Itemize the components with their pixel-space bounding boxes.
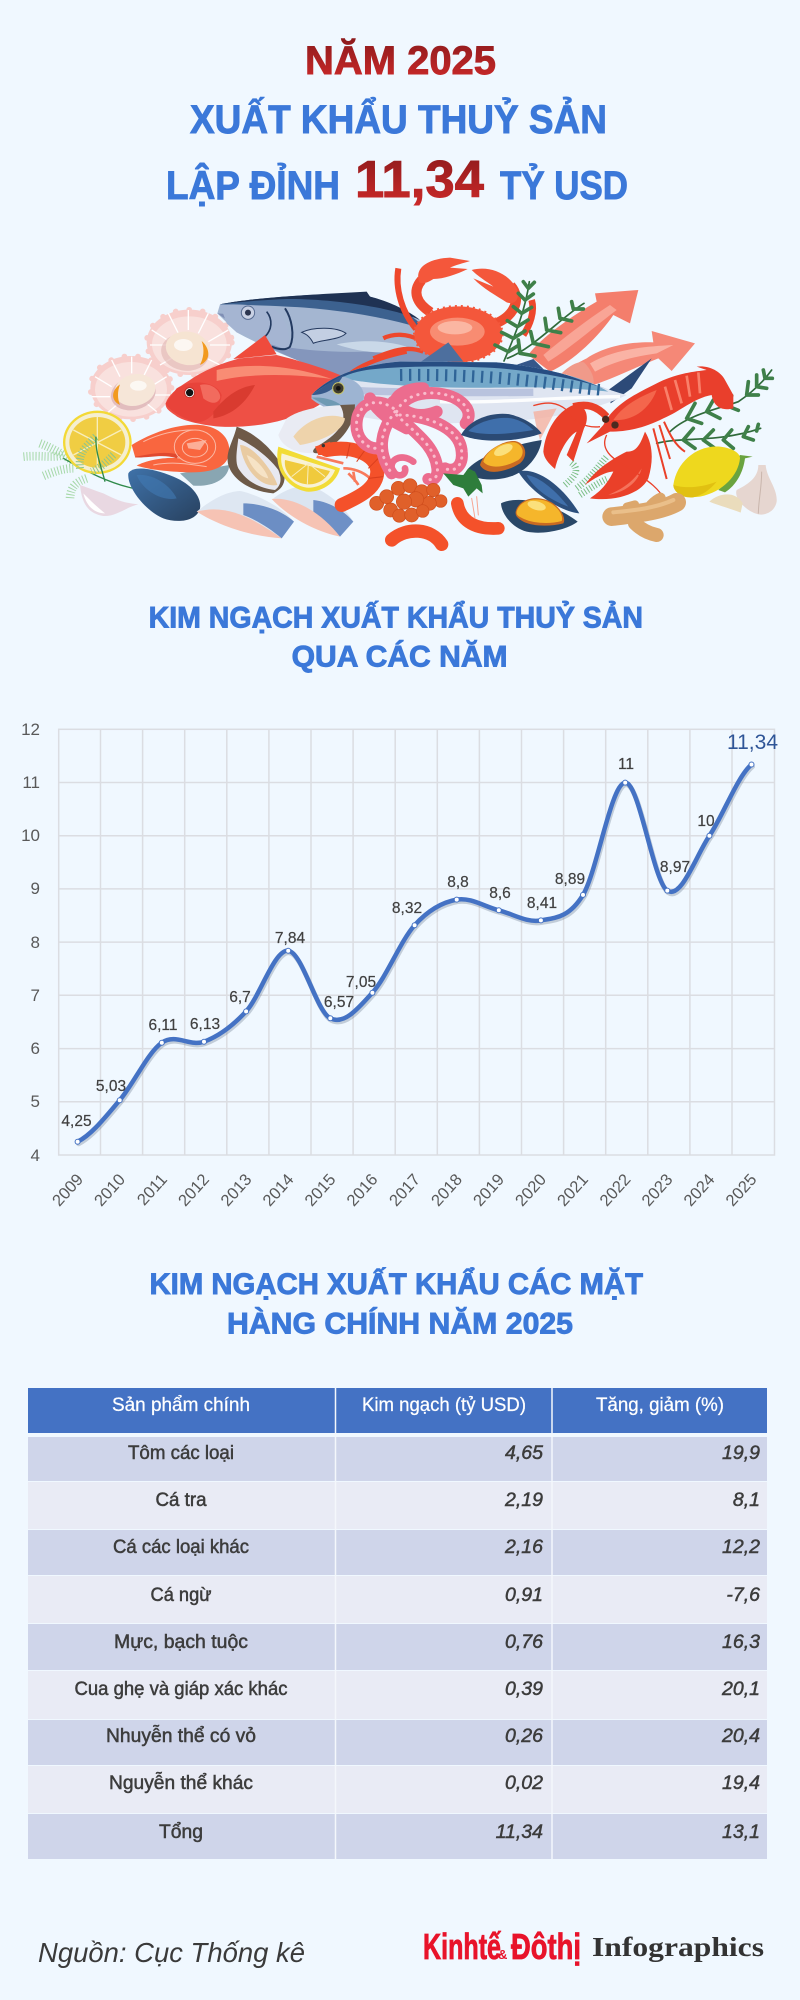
data labels: 6,11 (148, 1017, 178, 1034)
icon: oysters (228, 404, 355, 493)
table header: Sản phẩm chính (112, 1394, 250, 1416)
x axis labels: 2011 (134, 1171, 171, 1209)
data labels: 10 (697, 813, 715, 830)
row: Tổng: 13,1 (722, 1821, 760, 1843)
row: Tôm các loại: Tôm các loại (128, 1442, 234, 1464)
y axis labels: 5 (31, 1092, 40, 1111)
data labels: 7,84 (275, 930, 305, 947)
table header (28, 1388, 767, 1433)
row: Cua ghẹ và giáp xác khác: 20,1 (721, 1678, 760, 1700)
data labels: 6,13 (190, 1016, 220, 1033)
icon: fish fillets (197, 486, 353, 538)
row: Nguyễn thể khác (28, 1766, 767, 1813)
x axis labels: 2022 (597, 1171, 634, 1210)
icon: ginger (612, 498, 677, 535)
logo (423, 1926, 764, 1967)
row: Nhuyễn thể có vỏ (28, 1720, 767, 1765)
heading: table (150, 1267, 643, 1340)
icon: mackerel (312, 342, 652, 440)
row: Cá ngừ: -7,6 (726, 1584, 760, 1606)
table header: Kim ngạch (tỷ USD) (362, 1394, 526, 1416)
icon: garlic clove (80, 485, 138, 516)
icon: lemon slice (63, 411, 132, 482)
x axis labels: 2025 (723, 1171, 760, 1210)
data labels: 8,89 (555, 871, 585, 888)
row: Nhuyễn thể có vỏ: 0,26 (505, 1725, 543, 1747)
row: Cua ghẹ và giáp xác khác: Cua ghẹ và giáp xác khác (74, 1678, 288, 1700)
icon: octopus (356, 388, 469, 480)
icon: tuna (217, 292, 440, 379)
row: Tôm các loại: 19,9 (722, 1442, 760, 1464)
icon: squid (528, 290, 695, 385)
x axis labels: 2018 (428, 1171, 466, 1210)
heading: chart: KIM NGẠCH XUẤT KHẨU THUỶ SẢN (149, 600, 643, 634)
x axis labels: 2023 (639, 1171, 676, 1210)
icon: salmon steak (132, 425, 229, 486)
icon: small dill (565, 457, 608, 495)
title: XUẤT KHẨU THUỶ SẢN (190, 95, 607, 142)
data line (78, 764, 753, 1144)
y axis labels: 9 (31, 879, 40, 898)
data labels: 4,25 (61, 1113, 92, 1130)
row: Cá tra (28, 1482, 767, 1529)
row: Nhuyễn thể có vỏ: 20,4 (721, 1725, 760, 1747)
row: Tổng (28, 1814, 767, 1859)
row: Cá các loại khác: Cá các loại khác (113, 1536, 249, 1558)
heading: table: KIM NGẠCH XUẤT KHẨU CÁC MẶT (150, 1267, 643, 1301)
row: Cá tra: 8,1 (733, 1489, 760, 1511)
icon: lobster (533, 366, 733, 500)
row: Cua ghẹ và giáp xác khác (28, 1671, 767, 1719)
title: LẬP ĐỈNH (166, 162, 340, 208)
y axis labels: 8 (31, 933, 40, 952)
heading: table: HÀNG CHÍNH NĂM 2025 (227, 1306, 573, 1340)
icon: lemon wedge (277, 447, 340, 492)
logo: & (498, 1947, 507, 1962)
data labels: 11,34 (727, 731, 778, 754)
data labels: 6,7 (229, 989, 251, 1006)
title: NĂM 2025 (305, 38, 496, 83)
y axis labels (21, 720, 40, 1165)
row: Nguyễn thể khác: Nguyễn thể khác (109, 1771, 253, 1794)
illustration: seafood still life (23, 258, 777, 544)
data labels: 11 (618, 756, 634, 773)
row: Mực, bạch tuộc: 0,76 (505, 1631, 543, 1653)
x axis labels: 2010 (91, 1171, 129, 1210)
y axis labels: 4 (31, 1146, 40, 1165)
x axis labels: 2009 (49, 1171, 87, 1210)
title: 11,34 (355, 151, 484, 209)
data markers (75, 762, 754, 1144)
y axis labels: 10 (21, 826, 40, 845)
x axis labels: 2015 (302, 1171, 339, 1210)
x axis labels: 2013 (218, 1171, 255, 1210)
x axis labels: 2014 (260, 1171, 297, 1210)
row: Tôm các loại: 4,65 (505, 1442, 543, 1464)
data labels: 7,05 (346, 974, 376, 991)
title: TỶ USD (500, 162, 628, 208)
x axis labels: 2016 (344, 1171, 381, 1210)
row: Cá tra: 2,19 (504, 1489, 543, 1511)
row: Mực, bạch tuộc: Mực, bạch tuộc (114, 1631, 248, 1653)
icon: right rosemary (657, 370, 772, 448)
row: Cua ghẹ và giáp xác khác: 0,39 (505, 1678, 543, 1700)
row: Nhuyễn thể có vỏ: Nhuyễn thể có vỏ (106, 1724, 256, 1747)
y axis labels: 11 (22, 773, 40, 792)
data labels: 8,41 (527, 895, 557, 912)
data labels (61, 731, 778, 1130)
heading: chart (149, 600, 643, 674)
source note: Nguồn: Cục Thống kê (38, 1937, 305, 1968)
icon: rosemary (495, 282, 584, 361)
row: Cá ngừ: Cá ngừ (150, 1584, 212, 1606)
x axis labels: 2012 (175, 1171, 213, 1210)
x axis labels: 2017 (386, 1171, 424, 1210)
row: Mực, bạch tuộc: 16,3 (722, 1631, 760, 1653)
logo: Kinhtế (423, 1926, 502, 1967)
row: Tổng: 11,34 (496, 1821, 543, 1843)
data labels: 8,8 (447, 874, 469, 891)
row: Cá ngừ: 0,91 (505, 1584, 543, 1606)
x axis labels: 2020 (512, 1171, 550, 1210)
x axis labels: 2019 (470, 1171, 508, 1210)
icon: red fish (166, 335, 353, 427)
x axis labels: 2024 (681, 1171, 718, 1210)
y axis labels: 6 (31, 1039, 40, 1058)
heading: chart: QUA CÁC NĂM (292, 640, 508, 674)
row: Mực, bạch tuộc (28, 1624, 767, 1670)
data labels: 8,6 (489, 885, 511, 902)
title (166, 38, 628, 209)
icon: parsley (443, 468, 483, 497)
row: Tôm các loại (28, 1437, 767, 1481)
row: Cá tra: Cá tra (156, 1489, 207, 1511)
icon: left dill sprig (23, 443, 133, 500)
table (28, 1388, 767, 1859)
line chart (21, 720, 778, 1210)
logo: Infographics (592, 1932, 764, 1962)
icon: roe (370, 479, 447, 522)
icon: closed mussel (128, 469, 200, 521)
x axis labels (49, 1171, 760, 1210)
icon: scallops (90, 310, 232, 419)
row: Cá các loại khác (28, 1530, 767, 1575)
logo: Đôthị (511, 1926, 581, 1967)
row: Tổng: Tổng (159, 1821, 203, 1843)
y axis labels: 7 (31, 986, 40, 1005)
table header: Tăng, giảm (%) (596, 1394, 724, 1416)
row: Nguyễn thể khác: 19,4 (722, 1772, 760, 1794)
row: Nguyễn thể khác: 0,02 (505, 1772, 543, 1794)
icon: small shrimps (392, 497, 498, 544)
row: Cá ngừ (28, 1576, 767, 1623)
x axis labels: 2021 (554, 1171, 592, 1210)
row: Cá các loại khác: 12,2 (722, 1536, 760, 1558)
data labels: 8,32 (392, 900, 422, 917)
icon: garlic (709, 465, 777, 515)
icon: mussels (461, 414, 579, 533)
icon: large shrimp (315, 442, 383, 505)
data labels: 8,97 (660, 859, 690, 876)
data labels: 5,03 (96, 1078, 126, 1095)
icon: lemon and pepper (673, 447, 753, 497)
data labels: 6,57 (324, 994, 354, 1011)
y axis labels: 12 (21, 720, 40, 739)
icon: crab (343, 258, 533, 380)
row: Cá các loại khác: 2,16 (504, 1536, 543, 1558)
